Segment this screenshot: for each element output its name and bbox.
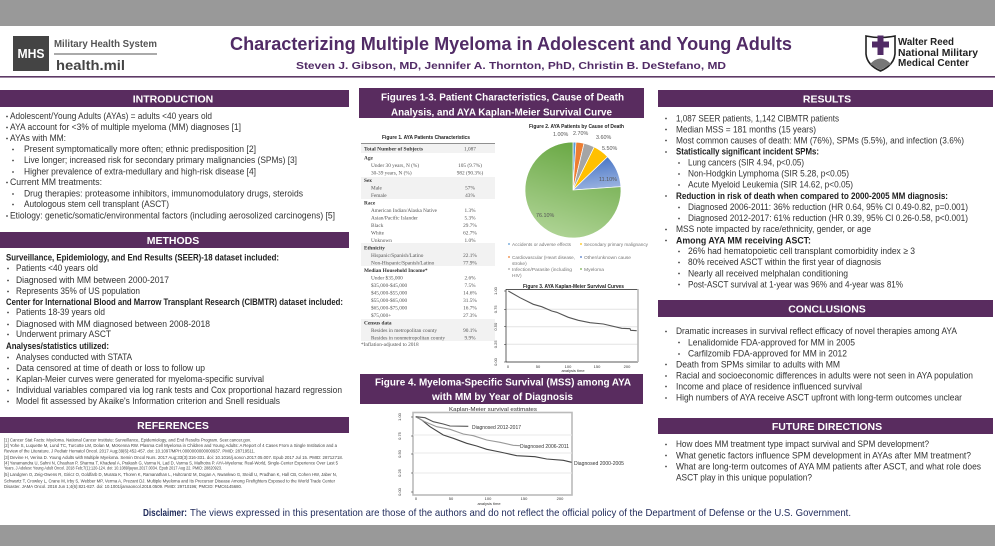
table: figure 1 AYA patients characteristics: Figure 1. AYA Patients Characteristics	[382, 135, 470, 141]
text block: results bullets: Median MSS = 181 months (15 years)	[676, 124, 816, 134]
table: figure 1 AYA patients characteristics: 31.5%	[463, 298, 477, 304]
text block: references list: Schwartz T, Crowley L, Crane M, Irby S, Webber MP, Verma A, Prezant DJ. Multiple Myeloma and Its Precursor Disease Among Firefighters Exposed to the World Trade Center	[4, 478, 336, 483]
text block: results bullets: Post-ASCT survival at 1-year was 96% and 4-year was 81%	[688, 279, 903, 289]
chart: figure 4 Kaplan-Meier by year of diagnosis: Kaplan-Meier survival estimates	[449, 407, 537, 413]
chart: figure 4 Kaplan-Meier by year of diagnosis: 100	[485, 496, 492, 501]
curve: diagnosed 2012-2017: Diagnosed 2012-2017	[472, 425, 521, 431]
table: figure 1 AYA patients characteristics: 27.3%	[463, 313, 477, 319]
chart: figure 4 Kaplan-Meier by year of diagnosis: 0	[415, 496, 418, 501]
heading: figures 1-3: Figures 1-3. Patient Characteristics, Cause of Death	[381, 92, 624, 104]
chart: figure 2 pie of cause of death: 11.10%	[599, 177, 617, 183]
text block: references list: [1] Cancer Stat Facts: Myeloma. National Cancer Institute: Surveillance, Epidemiology, and End Results Program. Seer.cancer.gov.	[4, 438, 251, 442]
text block: results bullets: Acute Myeloid Leukemia (SIR 14.62, p<0.05)	[688, 180, 853, 190]
text block: methods bullets: Patients 18-39 years old	[16, 307, 105, 317]
heading: references	[0, 417, 349, 433]
text block: conclusions bullets: High numbers of AYA receive ASCT upfront with long-term outcomes unclear	[676, 393, 962, 403]
chart legend: HIV)	[512, 273, 522, 279]
chart: figure 4 Kaplan-Meier by year of diagnosis: 0.75	[397, 431, 402, 440]
logo: Walter Reed National Military Medical Center: National Military	[898, 47, 978, 59]
chart: figure 3 Kaplan-Meier survival curve: Figure 3. AYA Kaplan-Meier Survival Curves	[523, 284, 624, 290]
table: figure 1 AYA patients characteristics: 16.7%	[463, 305, 477, 311]
disclaimer: The views expressed in this presentation are those of the authors and do not reflect the official policy of the Department of Defense or the U.S. Government.	[190, 507, 851, 519]
heading: results	[658, 90, 993, 107]
panel: introduction	[0, 90, 349, 220]
chart: figure 3 Kaplan-Meier survival curve: 100	[565, 364, 572, 369]
table: figure 1 AYA patients characteristics: 1,087	[464, 147, 476, 153]
table: figure 1 AYA patients characteristics: Non-Hispanic/Spanish/Latino	[371, 261, 435, 267]
text block: future directions bullets: What genetic factors influence SPM development in AYAs after MM treatment?	[676, 450, 971, 460]
table: figure 1 AYA patients characteristics	[361, 135, 495, 348]
table: figure 1 AYA patients characteristics: 62.7%	[463, 231, 477, 237]
table: figure 1 AYA patients characteristics: Black	[371, 223, 384, 229]
panel: future directions	[658, 418, 993, 483]
chart legend: Cardiovascular (Heart disease,	[512, 255, 575, 261]
table: figure 1 AYA patients characteristics: 30-39 years, N (%)	[371, 170, 412, 177]
table: figure 1 AYA patients characteristics: Unknown	[371, 238, 392, 244]
table: figure 1 AYA patients characteristics: Ethnicity	[364, 246, 385, 252]
text block: methods bullets: Analyses conducted with STATA	[16, 352, 133, 362]
title: Characterizing Multiple Myeloma in Adolescent and Young Adults	[230, 34, 792, 54]
text block: conclusions bullets: Lenalidomide FDA-approved for MM in 2005	[688, 337, 855, 347]
chart legend: Myeloma	[584, 267, 604, 273]
text block: future directions bullets: ASCT play in this unique population?	[676, 473, 812, 483]
panel: conclusions	[658, 300, 993, 403]
text block: methods bullets	[6, 252, 343, 406]
heading: figures 1-3: Analysis, and AYA Kaplan-Meier Survival Curve	[391, 106, 612, 118]
logo: Military Health System	[13, 36, 157, 73]
table: figure 1 AYA patients characteristics: 29.7%	[463, 223, 477, 229]
text block: references list: [4] Yanamandra U, Sahni N, Chauhan P, Sharma T, Khadwal A, Prakash G, Varma N, Lad D, Varma S, Malhotra P. AYA-Myeloma: Real-World, Single-Center Experience Over Last 5	[4, 460, 339, 465]
text block: results bullets: Among AYA MM receiving ASCT:	[676, 235, 811, 245]
heading: methods	[0, 232, 349, 248]
text block: references list: Disaster. JAMA Oncol. 2018 Jun 1;4(6):821-827. doi: 10.1001/jamaoncol.2018.0509. PMID: 29710196; PMCID: PMC6145680.	[4, 484, 242, 489]
text block: results bullets	[665, 113, 968, 289]
chart legend: Infection/Parasite (including	[512, 267, 572, 273]
text block: introduction bullets: Live longer; increased risk for secondary primary malignancies (SPMs) [3]	[24, 155, 297, 165]
text block: conclusions bullets: Dramatic increases in survival reflect efficacy of novel therapies among AYA	[676, 326, 958, 336]
table: figure 1 AYA patients characteristics: 9.9%	[464, 335, 476, 341]
text block: results bullets: 1,087 SEER patients, 1,142 CIBMTR patients	[676, 113, 839, 123]
text block: methods bullets: Underwent primary ASCT	[16, 329, 111, 339]
table: figure 1 AYA patients characteristics: Male	[371, 186, 383, 192]
chart: figure 4 Kaplan-Meier by year of diagnosis: 50	[449, 496, 454, 501]
text block: introduction bullets: Adolescent/Young Adults (AYAs) = adults <40 years old	[10, 111, 212, 121]
text block: methods bullets: Patients <40 years old	[16, 263, 98, 273]
curve: diagnosed 2000-2005	[416, 417, 624, 467]
curve: diagnosed 2006-2011	[416, 417, 569, 450]
text block: introduction bullets: Drug therapies: proteasome inhibitors, immunomodulatory drugs, steroids	[24, 188, 303, 198]
text block: references list: [2] Yohe S, Luquette M, Lund TC, Turcotte LM, Dolan M, McKenna RW. Plasma Cell Myeloma in Children and Young Adults: A Report of 4 Cases From a Single Institution and a	[4, 443, 338, 448]
table: figure 1 AYA patients characteristics: Hispanic/Spanish/Latino	[371, 253, 424, 259]
chart: figure 4 Kaplan-Meier by year of diagnosis	[397, 407, 624, 506]
table: figure 1 AYA patients characteristics: $65,000-$75,000	[371, 304, 408, 311]
logo: Walter Reed National Military Medical Center: Walter Reed	[898, 36, 954, 48]
chart legend: Other/unknown cause	[584, 255, 631, 261]
text block: results bullets: Most common causes of death: MM (76%), SPMs (5.5%), and infection (3.6%)	[676, 135, 964, 145]
table: figure 1 AYA patients characteristics: Sex	[364, 178, 372, 184]
table: figure 1 AYA patients characteristics: Under 30 years, N (%)	[371, 162, 419, 169]
heading: figure 4	[360, 374, 643, 404]
logo: Military Health System: MHS	[18, 46, 45, 61]
chart legend	[508, 242, 649, 279]
text block: introduction bullets: Etiology: genetic/somatic/environmental factors (including aerosolized carcinogens) [5]	[10, 210, 335, 220]
logo: Walter Reed National Military Medical Center: Medical Center	[898, 57, 969, 69]
text block: methods bullets: Kaplan-Meier curves were generated for myeloma-specific survival	[16, 374, 264, 384]
curve: diagnosed 2012-2017	[416, 417, 521, 431]
table: figure 1 AYA patients characteristics: 5.3%	[464, 216, 476, 222]
text block: references list: Review of the Literature. J Pediatr Hematol Oncol. 2017 Aug;39(6):452-457. doi: 10.1097/MPH.0000000000000937. PMID: 28719511.	[4, 448, 255, 453]
table: figure 1 AYA patients characteristics: 7.5%	[464, 283, 476, 289]
table: figure 1 AYA patients characteristics: Resides in metropolitan county	[371, 328, 437, 334]
authors: Steven J. Gibson, MD, Jennifer A. Thornton, PhD, Christin B. DeStefano, MD	[296, 60, 726, 72]
chart: figure 3 Kaplan-Meier survival curve: 1.00	[493, 286, 498, 295]
panel: figures 1-3	[359, 88, 649, 373]
panel: results	[658, 90, 993, 289]
chart: figure 3 Kaplan-Meier survival curve: 0.00	[493, 357, 498, 366]
table: figure 1 AYA patients characteristics: 22.1%	[463, 253, 477, 259]
table: figure 1 AYA patients characteristics: Age	[364, 156, 373, 162]
chart: figure 2 pie of cause of death: Figure 2. AYA Patients by Cause of Death	[529, 124, 624, 130]
heading: future directions: FUTURE DIRECTIONS	[772, 421, 882, 433]
heading: references: REFERENCES	[137, 420, 209, 432]
panel: figure 4	[360, 374, 643, 506]
text block: results bullets: 26% had hematopoietic cell transplant comorbidity index ≥ 3	[688, 246, 915, 256]
text block: methods bullets: Surveillance, Epidemiology, and End Results (SEER)-18 dataset included:	[6, 252, 279, 262]
text block: introduction bullets: Present symptomatically more often; ethnic predisposition [2]	[24, 144, 256, 154]
table: figure 1 AYA patients characteristics: $55,000-$65,000	[371, 297, 408, 304]
chart: figure 3 Kaplan-Meier survival curve: 0	[507, 364, 510, 369]
chart: figure 2 pie of cause of death: 5.50%	[602, 146, 617, 152]
heading: introduction	[0, 90, 349, 107]
table: figure 1 AYA patients characteristics: 14.6%	[463, 290, 477, 296]
table: figure 1 AYA patients characteristics: $35,000-$45,000	[371, 282, 408, 289]
logo: Walter Reed National Military Medical Center	[866, 36, 978, 71]
text block: conclusions bullets: Carfilzomib FDA-approved for MM in 2012	[688, 349, 847, 359]
chart: figure 4 Kaplan-Meier by year of diagnosis: 0.00	[397, 487, 402, 496]
text block: results bullets: Lung cancers (SIR 4.94, p<0.05)	[688, 158, 804, 168]
text block: results bullets: Diagnosed 2006-2011: 36% reduction (HR 0.64, 95% CI 0.49-0.82, p=0.001)	[688, 202, 968, 212]
text block: references list: Years. J Adolesc Young Adult Oncol. 2018 Feb;7(1):120-124. doi: 10.1089/jayao.2017.0034. Epub 2017 Aug 22. PMID: 28820923.	[4, 466, 222, 471]
table: figure 1 AYA patients characteristics: Resides in nonmetropolitan county	[371, 335, 445, 341]
disclaimer: Disclaimer:	[143, 507, 187, 519]
chart: figure 4 Kaplan-Meier by year of diagnosis: analysis time	[477, 501, 501, 506]
text block: methods bullets: Diagnosed with MM between 2000-2017	[16, 275, 169, 285]
text block: methods bullets: Represents 35% of US population	[16, 286, 140, 296]
chart legend: Secondary primary malignancy	[584, 242, 649, 248]
text block: results bullets: Reduction in risk of death when compared to 2000-2005 MM diagnosis:	[676, 191, 948, 201]
chart: figure 3 Kaplan-Meier survival curve: 0.25	[493, 340, 498, 348]
table: figure 1 AYA patients characteristics: 77.9%	[463, 261, 477, 267]
text block: results bullets: MSS note impacted by race/ethnicity, gender, or age	[676, 224, 871, 234]
text block: future directions bullets: How does MM treatment type impact survival and SPM development?	[676, 439, 929, 449]
chart: figure 4 Kaplan-Meier by year of diagnosis: 0.50	[397, 449, 402, 458]
text block: conclusions bullets: Income and place of residence influenced survival	[676, 381, 862, 391]
text block: methods bullets: Center for International Blood and Marrow Transplant Research (CIBMTR) dataset included:	[6, 297, 343, 307]
chart: figure 4 Kaplan-Meier by year of diagnosis: 0.25	[397, 468, 402, 477]
text block: results bullets: Statistically significant incident SPMs:	[676, 147, 819, 157]
table: figure 1 AYA patients characteristics: 90.1%	[463, 328, 477, 334]
text block: results bullets: Nearly all received melphalan conditioning	[688, 268, 848, 278]
text block: references list: [3] Devine H, Verina D. Young Adults with Multiple Myeloma. Semin Oncol Nurs. 2017 Aug;33(3):316-331. doi: 10.1016/j.soncn.2017.05.007. Epub 2017 Jul 15. PMID: 28712718.	[4, 455, 343, 460]
text block: results bullets: Diagnosed 2012-2017: 61% reduction (HR 0.39, 95% CI 0.26-0.58, p<0.001)	[688, 213, 968, 223]
heading: results: RESULTS	[803, 94, 851, 106]
table: figure 1 AYA patients characteristics: $75,000+	[371, 312, 391, 319]
text block: methods bullets: Model fit assessed by Akaike's Information criterion and Snell residuals	[16, 396, 280, 406]
heading: methods: METHODS	[147, 235, 199, 247]
heading: figures 1-3	[359, 88, 644, 118]
chart: figure 3 Kaplan-Meier survival curve: 0.75	[493, 305, 498, 313]
chart legend: stroke)	[512, 261, 527, 267]
table: figure 1 AYA patients characteristics: Under $35,000	[371, 275, 403, 282]
table: figure 1 AYA patients characteristics: Census data	[364, 321, 392, 327]
chart: figure 2 pie of cause of death	[508, 124, 649, 279]
chart: figure 2 pie of cause of death: 3.60%	[596, 135, 611, 141]
table: figure 1 AYA patients characteristics: Total Number of Subjects	[364, 147, 423, 153]
text block: introduction bullets	[6, 111, 335, 220]
chart legend: Accidents or adverse effects	[512, 242, 572, 248]
table: figure 1 AYA patients characteristics: Female	[371, 193, 387, 199]
chart: figure 3 Kaplan-Meier survival curve: 150	[594, 364, 601, 369]
curve: diagnosed 2000-2005: Diagnosed 2000-2005	[574, 461, 624, 467]
table: figure 1 AYA patients characteristics: 57%	[465, 186, 475, 192]
table: figure 1 AYA patients characteristics: 43%	[465, 193, 475, 199]
chart: figure 2 pie of cause of death: 1.00%	[553, 132, 568, 138]
table: figure 1 AYA patients characteristics: 982 (90.3%)	[457, 170, 483, 177]
chart: figure 3 Kaplan-Meier survival curve: analysis time	[561, 368, 585, 373]
text block: references list: [5] Landgren O, Zeig-Owens R, Giricz O, Goldfarb D, Murata K, Thoren K, Ramanathan L, Hultcrantz M, Dogan A, Nwankwo G, Steidl U, Pradhan K, Hall CB, Cohen HW, Jaber N,	[4, 472, 337, 477]
chart: figure 2 pie of cause of death: 2.70%	[573, 131, 588, 137]
table: figure 1 AYA patients characteristics: *Inflation-adjusted to 2018	[361, 341, 419, 348]
chart: figure 4 Kaplan-Meier by year of diagnosis: 150	[521, 496, 528, 501]
heading: figure 4: with MM by Year of Diagnosis	[431, 391, 573, 403]
logo: Military Health System: Military Health System	[54, 39, 157, 50]
text block: methods bullets: Individual variables compared via log rank tests and Cox proportional hazard regression	[16, 385, 342, 395]
table: figure 1 AYA patients characteristics: 1.3%	[464, 208, 476, 214]
heading: conclusions: CONCLUSIONS	[788, 304, 866, 316]
panel: references	[0, 417, 349, 489]
text block: results bullets: Non-Hodgkin Lymphoma (SIR 5.28, p<0.05)	[688, 169, 849, 179]
text block: methods bullets: Diagnosed with MM diagnosed between 2008-2018	[16, 319, 210, 329]
table: figure 1 AYA patients characteristics: $45,000-$55,000	[371, 289, 408, 296]
text block: future directions bullets	[665, 439, 981, 483]
chart: figure 2 pie of cause of death: 76.10%	[536, 213, 554, 219]
text block: introduction bullets: Autologous stem cell transplant (ASCT)	[24, 199, 169, 209]
chart: figure 3 Kaplan-Meier survival curve	[493, 284, 638, 373]
table: figure 1 AYA patients characteristics: Asian/Pacific Islander	[371, 215, 418, 222]
text block: conclusions bullets: Death from SPMs similar to adults with MM	[676, 359, 840, 369]
text block: methods bullets: Analyses/statistics utilized:	[6, 341, 109, 351]
table: figure 1 AYA patients characteristics: 1.0%	[464, 238, 476, 244]
text block: methods bullets: Data censored at time of death or loss to follow up	[16, 363, 205, 373]
text block: conclusions bullets: Racial and socioeconomic differences in adults were not seen in AYA population	[676, 371, 973, 381]
heading: introduction: INTRODUCTION	[133, 94, 213, 106]
text block: introduction bullets: AYAs with MM:	[10, 133, 66, 143]
logo: Military Health System: health.mil	[56, 58, 125, 73]
heading: figure 4: Figure 4. Myeloma-Specific Survival (MSS) among AYA	[375, 376, 631, 388]
text block: introduction bullets: Higher prevalence of extra-medullary and high-risk disease [4]	[24, 166, 256, 176]
table: figure 1 AYA patients characteristics: American Indian/Alaska Native	[371, 208, 438, 214]
text block: references list	[4, 438, 343, 489]
text block: results bullets: 80% received ASCT within the first year of diagnosis	[688, 257, 881, 267]
text block: introduction bullets: Current MM treatments:	[10, 177, 102, 187]
curve: diagnosed 2006-2011: Diagnosed 2006-2011	[520, 444, 569, 450]
panel: methods	[0, 232, 349, 406]
table: figure 1 AYA patients characteristics: 2.6%	[464, 276, 476, 282]
chart: figure 3 Kaplan-Meier survival curve: 50	[536, 364, 541, 369]
chart: figure 4 Kaplan-Meier by year of diagnosis: 200	[557, 496, 564, 501]
chart: figure 4 Kaplan-Meier by year of diagnosis: 1.00	[397, 412, 402, 421]
text block: conclusions bullets	[665, 326, 973, 403]
heading: conclusions	[658, 300, 993, 317]
chart: figure 3 Kaplan-Meier survival curve: 200	[624, 364, 631, 369]
chart: figure 3 Kaplan-Meier survival curve: 0.50	[493, 322, 498, 331]
table: figure 1 AYA patients characteristics: 105 (9.7%)	[458, 162, 482, 169]
text block: introduction bullets: AYA account for <3% of multiple myeloma (MM) diagnoses [1]	[10, 122, 241, 132]
heading: future directions	[658, 418, 993, 434]
table: figure 1 AYA patients characteristics: White	[371, 231, 385, 237]
table: figure 1 AYA patients characteristics: Race	[364, 201, 376, 207]
table: figure 1 AYA patients characteristics: Median Household Income*	[364, 268, 428, 274]
